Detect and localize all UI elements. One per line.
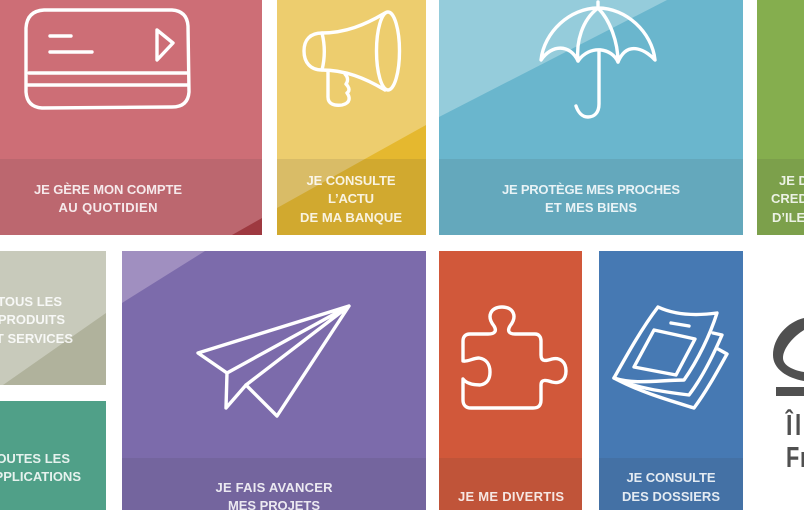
panel: je gère mon compte xyxy=(0,0,262,235)
caption band xyxy=(439,458,582,510)
logo: partial Île-de-France xyxy=(773,318,804,474)
panel: je fais avancer mes projets xyxy=(122,251,426,510)
caption xyxy=(622,470,720,510)
icon: bank card xyxy=(26,10,189,108)
panel: green partial tile xyxy=(757,0,804,235)
caption: DE MA BANQUE xyxy=(300,210,402,225)
caption xyxy=(0,451,81,484)
light diagonal overlay xyxy=(439,0,667,117)
panel: je me divertis xyxy=(439,251,582,510)
panel: je protège mes proches xyxy=(439,0,743,235)
caption: JE ME DIVERTIS xyxy=(458,489,564,504)
caption xyxy=(34,182,182,215)
panel: je consulte des dossiers pratiques xyxy=(599,251,743,510)
caption: L’ACTU xyxy=(328,191,374,206)
icon: brochures xyxy=(614,307,727,408)
caption: JE CONSULTE xyxy=(626,470,716,485)
logo mark xyxy=(773,318,804,381)
caption: DES DOSSIERS xyxy=(622,489,720,504)
caption band xyxy=(122,458,426,510)
icon: megaphone xyxy=(304,12,400,105)
caption xyxy=(300,173,402,225)
logo text xyxy=(784,408,804,474)
dark diagonal overlay xyxy=(3,313,106,385)
red corner xyxy=(232,218,262,235)
caption: ET MES BIENS xyxy=(545,200,637,215)
caption band xyxy=(757,159,804,235)
light diagonal overlay xyxy=(277,0,426,208)
icon: umbrella xyxy=(541,2,655,117)
panel: tous les produits xyxy=(0,251,106,385)
caption band xyxy=(439,159,743,235)
caption band xyxy=(277,159,426,235)
caption xyxy=(502,182,680,215)
icon: paper plane xyxy=(198,306,349,416)
icon: puzzle piece xyxy=(463,307,566,408)
light corner xyxy=(122,251,205,303)
caption xyxy=(771,173,804,225)
caption band xyxy=(0,159,262,235)
caption: JE CONSULTE xyxy=(306,173,396,188)
panel: je consulte l'actu xyxy=(277,0,426,235)
caption band xyxy=(599,458,743,510)
caption: JE PROTÈGE MES PROCHES xyxy=(502,182,680,197)
caption xyxy=(0,294,73,346)
caption: JE GÈRE MON COMPTE xyxy=(34,182,182,197)
caption xyxy=(216,480,333,510)
caption: JE FAIS AVANCER xyxy=(216,480,333,495)
caption: AU QUOTIDIEN xyxy=(58,200,158,215)
panel: toutes les applications xyxy=(0,401,106,510)
